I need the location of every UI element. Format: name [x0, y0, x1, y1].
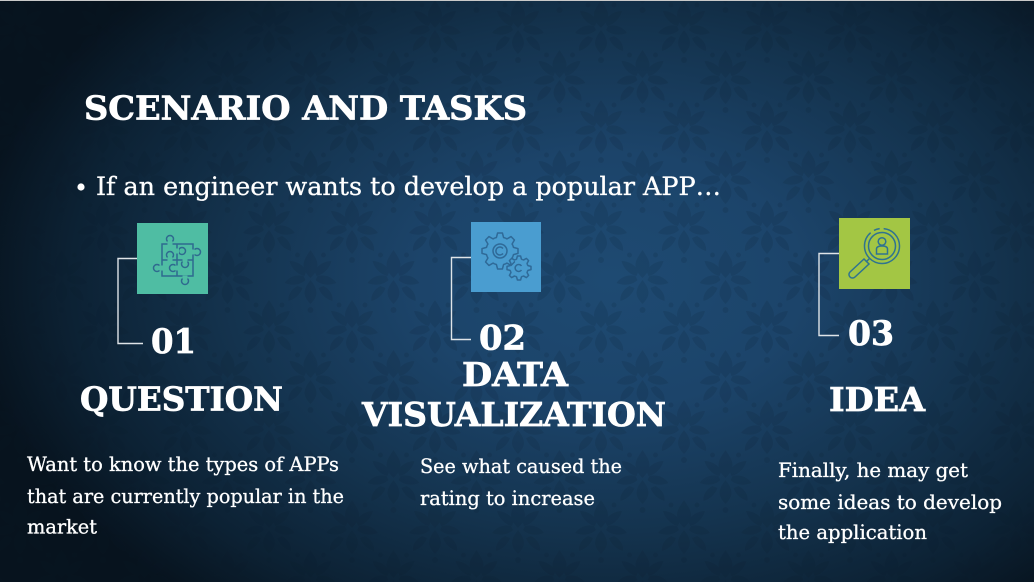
- number 03: 03: [848, 314, 894, 354]
- heading idea: IDEA: [829, 380, 925, 419]
- connector bracket 1: [118, 258, 143, 344]
- icon: puzzle: [137, 223, 208, 294]
- connector bracket 2: [452, 258, 471, 340]
- description question: that are currently popular in the: [27, 484, 344, 508]
- icon: magnifier with person: [839, 218, 910, 289]
- description question: Want to know the types of APPs: [27, 452, 339, 476]
- panel: idea: [778, 218, 1002, 544]
- description idea: [778, 458, 1002, 544]
- title: SCENARIO AND TASKS: [84, 88, 527, 128]
- description question: market: [27, 514, 97, 538]
- icon: gears: [471, 222, 541, 292]
- description data visualization: [420, 454, 622, 510]
- panel: data visualization: [361, 222, 666, 510]
- panel: question: [27, 223, 344, 538]
- connector bracket 3: [819, 254, 839, 336]
- description idea: Finally, he may get: [778, 458, 968, 482]
- description idea: some ideas to develop: [778, 490, 1002, 514]
- description data visualization: See what caused the: [420, 454, 622, 478]
- number 01: 01: [151, 322, 196, 362]
- bullet line: If an engineer wants to develop a popular APP…: [96, 172, 721, 201]
- heading data visualization: [361, 355, 666, 434]
- number 02: 02: [479, 318, 526, 358]
- description data visualization: rating to increase: [420, 486, 595, 510]
- heading question: QUESTION: [80, 380, 283, 418]
- description question: [27, 452, 344, 538]
- heading data visualization: DATA: [462, 355, 568, 394]
- heading data visualization: VISUALIZATION: [361, 395, 666, 434]
- description idea: the application: [778, 520, 927, 544]
